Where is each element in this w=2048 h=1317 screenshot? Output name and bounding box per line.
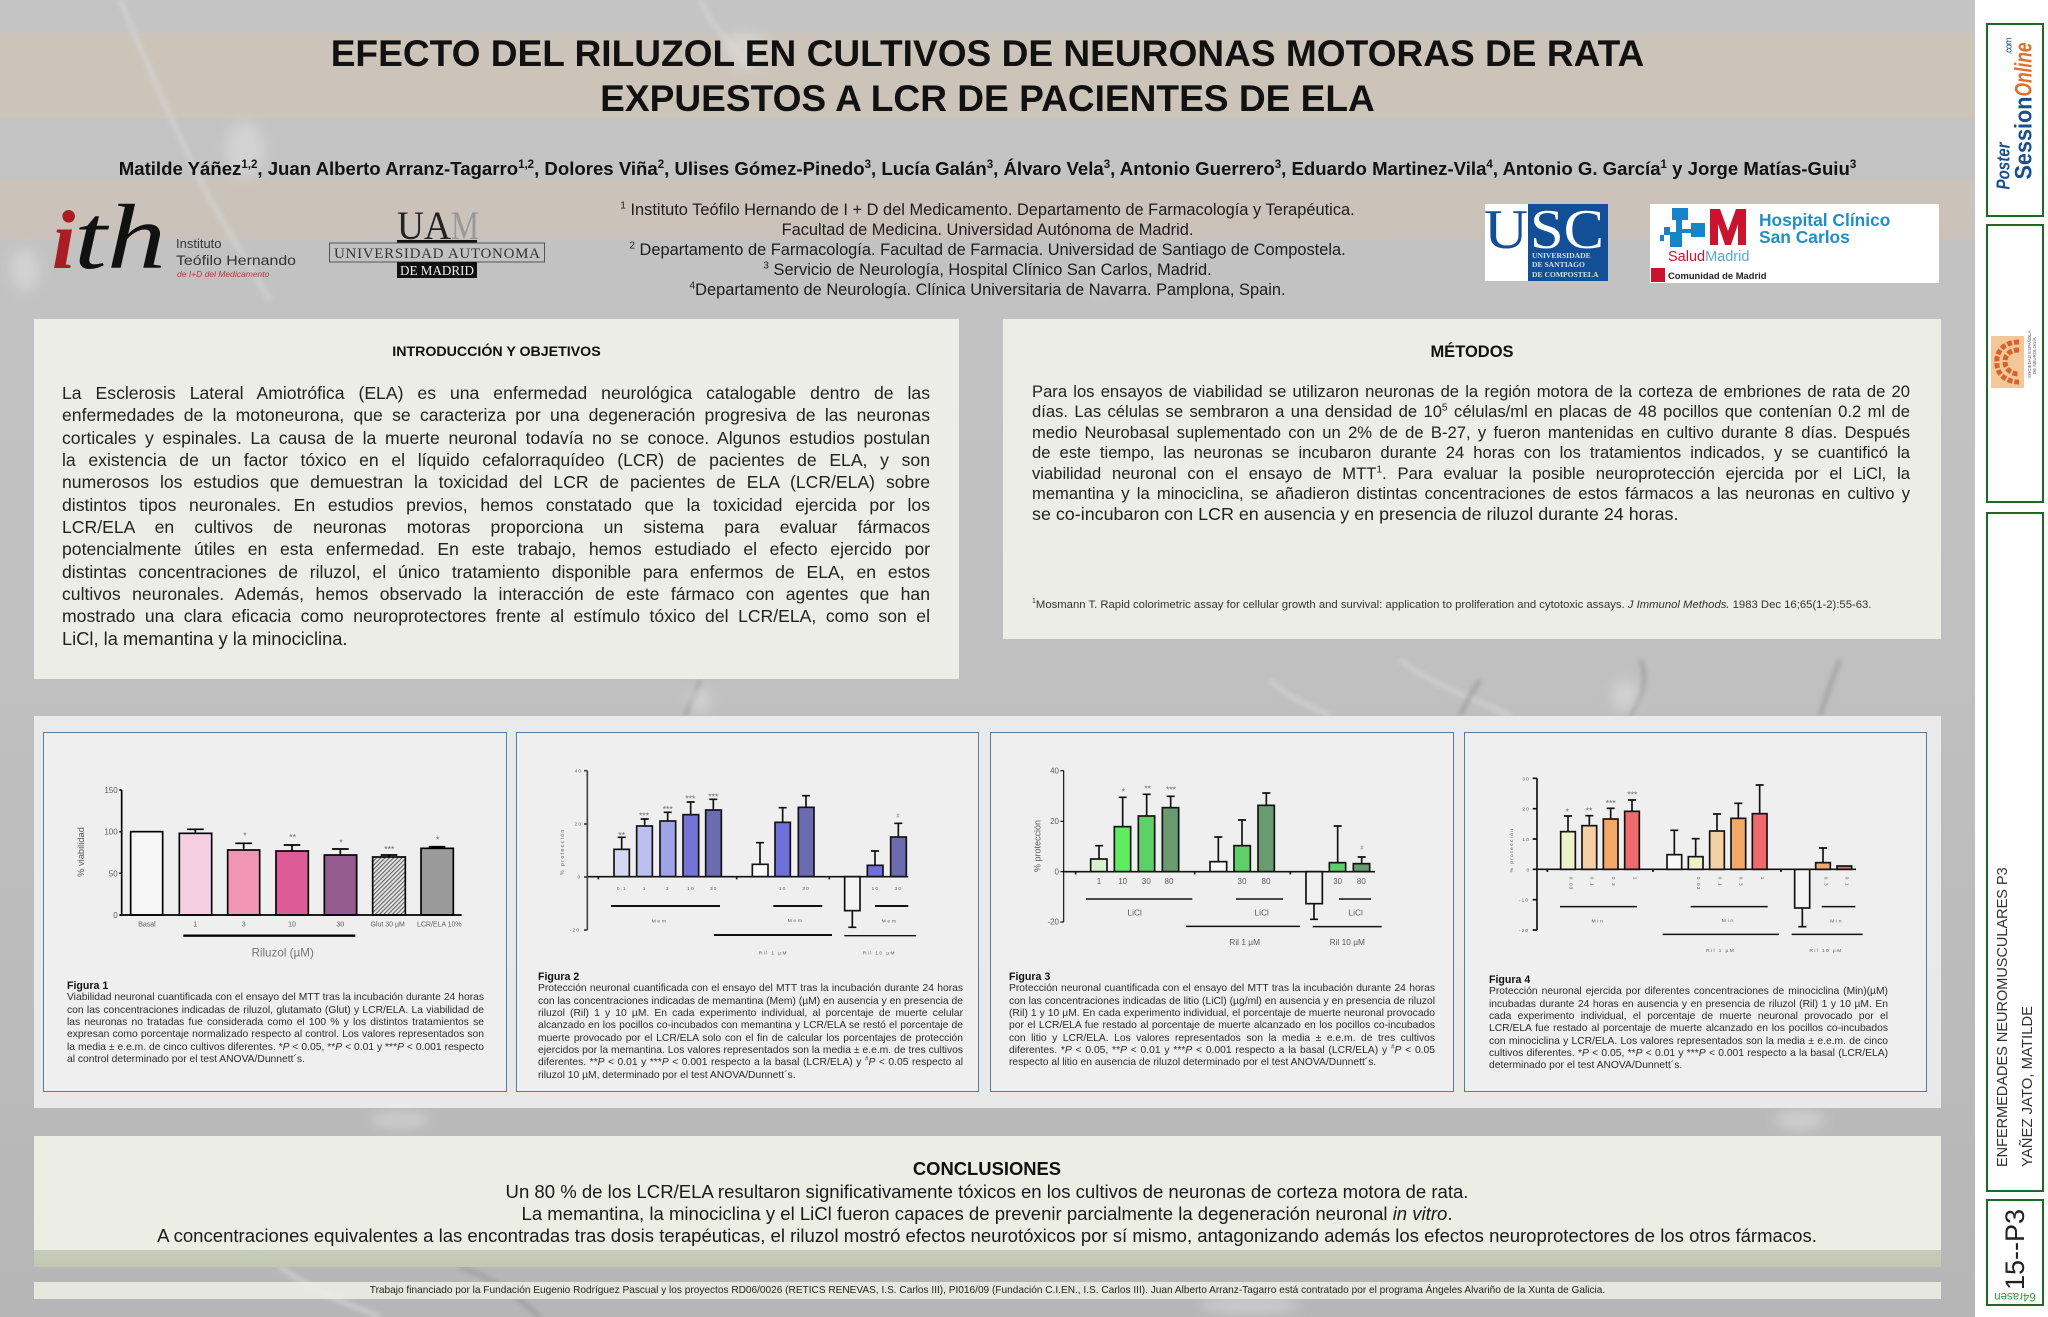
reference: 1Mosmann T. Rapid colorimetric assay for cellular growth and survival: application to proliferation and cytotoxic assays. J Immunol Methods. 1983 Dec 16;65(1-2):55-63. bbox=[1032, 598, 1871, 611]
chart: protección por memantina: 10 bbox=[872, 886, 879, 892]
chart: protección por memantina: *** bbox=[639, 811, 650, 821]
chart: protección por minociclina: Ril 1 µM bbox=[1706, 948, 1735, 954]
text block: métodos: memantina y la minociclina, se añadieron distintas concentraciones de estos fármacos a las neuronas en cultivo y bbox=[1032, 484, 1910, 503]
text block: introducción: distintas concentraciones de riluzol, el único tratamiento disponible para enfermos de ELA, en estos bbox=[62, 562, 930, 582]
caption: figura 3: Figura 3 bbox=[1009, 971, 1050, 983]
caption: figura 4 bbox=[1489, 974, 1888, 1071]
text block: conclusiones: A concentraciones equivalentes a las encontradas tras dosis terapéuticas, el riluzol mostró efectos neurotóxicos por sí mismo, antagonizando además los efectos neuroprotectores de los otros fármacos. bbox=[157, 1225, 1817, 1246]
chart: protección por minociclina: Min bbox=[1591, 919, 1605, 925]
caption: figura 2 bbox=[538, 971, 963, 1081]
sidebar: Sociedad Española de Neurología logo: DE NEUROLOGÍA bbox=[2032, 337, 2037, 374]
chart: protección por litio: Ril 10 µM bbox=[1330, 937, 1365, 947]
logo: Instituto Teófilo Hernando: Instituto bbox=[176, 236, 222, 251]
figure 2 bbox=[516, 732, 979, 1092]
logo: Hospital Clínico San Carlos: Hospital Clínico bbox=[1759, 210, 1890, 230]
chart: protección por litio: LiCl bbox=[1254, 907, 1269, 917]
panel: conclusiones bbox=[34, 1136, 1941, 1267]
caption: figura 3 bbox=[1009, 971, 1435, 1068]
logo: Universidade de Santiago de Compostela: UNIVERSIDADE bbox=[1532, 251, 1591, 260]
chart: protección por memantina: ** bbox=[618, 830, 626, 840]
sidebar: PosterSessionOnline logo: Session bbox=[2010, 96, 2038, 180]
chart: protección por minociclina: 0.3 bbox=[1822, 877, 1828, 887]
text block: métodos: viabilidad neuronal con el ensayo de MTT1. Para evaluar la posible neuroprotección ejercida por el LiCl, la bbox=[1032, 464, 1910, 483]
chart: viabilidad neuronal: 150 bbox=[104, 786, 118, 795]
caption: figura 2: con las concentraciones indicadas de memantina (Mem) (µM) en ausencia y en presencia de bbox=[538, 996, 963, 1007]
text block: métodos: se co-incubaron con LCR en ausencia y en presencia de riluzol durante 24 horas. bbox=[1032, 504, 1678, 524]
sidebar: Sociedad Española de Neurología logo bbox=[1986, 224, 2044, 503]
caption: figura 1 bbox=[67, 980, 484, 1065]
chart: viabilidad neuronal: 30 bbox=[336, 921, 344, 928]
text block: métodos: Para los ensayos de viabilidad se utilizaron neuronas de la región motora de la corteza de embriones de rata de 20 bbox=[1032, 382, 1910, 401]
chart: protección por minociclina: 0.03 bbox=[1567, 877, 1573, 890]
caption: figura 1: Figura 1 bbox=[67, 980, 108, 992]
heading: métodos: MÉTODOS bbox=[1430, 343, 1514, 361]
text block: conclusiones: Un 80 % de los LCR/ELA resultaron significativamente tóxicos en los cultivos de neuronas de corteza motora de rata. bbox=[506, 1181, 1468, 1202]
chart: protección por minociclina: 0.1 bbox=[1844, 877, 1850, 887]
chart: protección por minociclina: Min bbox=[1830, 919, 1843, 925]
chart: viabilidad neuronal: 0 bbox=[113, 911, 118, 920]
logo: Universidad Autónoma de Madrid bbox=[329, 206, 545, 279]
sidebar: session and author bbox=[1986, 512, 2044, 1192]
chart: protección por memantina: *** bbox=[708, 791, 719, 801]
logo: Universidade de Santiago de Compostela: DE SANTIAGO bbox=[1532, 260, 1585, 269]
chart: viabilidad neuronal: *** bbox=[384, 844, 395, 854]
chart: protección por litio: 80 bbox=[1165, 877, 1174, 886]
chart: viabilidad neuronal: * bbox=[436, 835, 440, 845]
text block: conclusiones bbox=[157, 1181, 1817, 1246]
chart: protección por litio: 30 bbox=[1238, 877, 1247, 886]
chart: protección por memantina: *** bbox=[685, 794, 696, 804]
chart: viabilidad neuronal: ** bbox=[289, 832, 297, 842]
caption: figura 3: Protección neuronal cuantificada con el ensayo del MTT tras la incubación durante 24 horas bbox=[1009, 983, 1435, 994]
caption: figura 3: por el LCR/ELA fue restado al porcentaje de muerte alcanzado en los pocillos co-incubados bbox=[1009, 1020, 1435, 1031]
logo: Instituto Teófilo Hernando: Teófilo Hernando bbox=[176, 252, 296, 268]
caption: figura 1: expresan como porcentaje normalizado respecto al control. Los valores representados son bbox=[67, 1029, 484, 1040]
logo: Universidad Autónoma de Madrid: UNIVERSIDAD AUTONOMA bbox=[334, 246, 540, 262]
chart: protección por minociclina: 1 bbox=[1759, 877, 1765, 880]
text block: introducción: la existencia de un factor tóxico en el líquido cefalorraquídeo (LCR) de pacientes de ELA, y son bbox=[62, 450, 930, 470]
text block: introducción: LCR/ELA en cultivos de neuronas motoras proporciona un sistema para evaluar fármacos bbox=[62, 517, 930, 537]
chart: protección por memantina: *** bbox=[663, 804, 673, 814]
chart: viabilidad neuronal: 100 bbox=[104, 828, 118, 837]
chart: viabilidad neuronal bbox=[76, 786, 462, 960]
chart: viabilidad neuronal: % viabilidad bbox=[76, 827, 86, 877]
title bbox=[331, 32, 1644, 119]
chart: protección por memantina: 0 bbox=[577, 875, 581, 881]
chart: protección por minociclina: Ril 10 µM bbox=[1809, 948, 1843, 954]
caption: figura 1: al control determinado por el test ANOVA/Dunnett´s. bbox=[67, 1054, 305, 1065]
logo: Instituto Teófilo Hernando bbox=[52, 200, 296, 285]
sidebar: PosterSessionOnline logo bbox=[1986, 23, 2044, 217]
chart: viabilidad neuronal: 10 bbox=[288, 921, 296, 928]
chart: viabilidad neuronal: * bbox=[339, 837, 343, 847]
caption: figura 2: ejercidos por la memantina. Los valores representados son la media ± e.e.m. de tres cultivos bbox=[538, 1045, 963, 1056]
chart: protección por minociclina: * bbox=[1566, 807, 1570, 817]
chart: viabilidad neuronal: * bbox=[243, 831, 247, 841]
caption: figura 2: diferentes. **P < 0.01 y ***P < 0.001 respecto a la basal (LCR/ELA) y #P < 0.05 respecto al bbox=[538, 1056, 963, 1068]
panel: introducción y objetivos bbox=[34, 319, 959, 679]
chart: protección por minociclina: *** bbox=[1627, 790, 1638, 800]
logo: Universidad Autónoma de Madrid: DE MADRID bbox=[400, 264, 474, 279]
chart: protección por minociclina: % protección bbox=[1509, 828, 1515, 872]
chart: protección por memantina: Mem bbox=[652, 919, 668, 925]
chart: protección por memantina: 30 bbox=[895, 886, 902, 892]
chart: viabilidad neuronal: 1 bbox=[193, 921, 197, 928]
caption: figura 4: con minociclina y LCR/ELA. Los valores representados son la media ± e.e.m. de cinco bbox=[1489, 1036, 1888, 1047]
chart: protección por minociclina: *** bbox=[1606, 798, 1616, 808]
chart: viabilidad neuronal: 3 bbox=[242, 921, 246, 928]
caption: figura 3: (Ril) 1 y 10 µM. En cada experimento individual, el porcentaje de muerte neuronal provocado bbox=[1009, 1008, 1435, 1019]
logo: Hospital Clínico San Carlos bbox=[1650, 204, 1939, 283]
funding acknowledgement bbox=[34, 1282, 1941, 1299]
caption: figura 1: la media ± e.e.m. de cinco cultivos diferentes. *P < 0.05, **P < 0.01 y ***P < 0.001 respecto bbox=[67, 1042, 484, 1053]
text block: métodos: medio Neurobasal suplementado con un 2% de de B-27, y fueron mantenidas en cultivo durante 8 días. Después bbox=[1032, 423, 1910, 442]
chart: protección por litio: LiCl bbox=[1127, 907, 1142, 917]
caption: figura 4: Figura 4 bbox=[1489, 974, 1530, 986]
logo: Hospital Clínico San Carlos: SaludMadrid bbox=[1668, 249, 1749, 265]
caption: figura 4: Protección neuronal ejercida por diferentes concentraciones de minociclina (Min)(µM) bbox=[1489, 986, 1888, 997]
logo: Hospital Clínico San Carlos: San Carlos bbox=[1759, 227, 1850, 247]
affiliations: 2 Departamento de Farmacología. Facultad de Farmacia. Universidad de Santiago de Compostela. bbox=[629, 241, 1346, 259]
chart: protección por litio: -20 bbox=[1047, 918, 1060, 927]
logo: Universidade de Santiago de Compostela bbox=[1485, 204, 1608, 281]
chart: protección por litio: * bbox=[1122, 787, 1126, 797]
caption: figura 3: diferentes. *P < 0.05, **P < 0.01 y ***P < 0.001 respecto a la basal (LCR/ELA) y #P < 0.05 bbox=[1009, 1044, 1435, 1056]
figure 1 bbox=[43, 732, 507, 1092]
chart: protección por litio: 80 bbox=[1357, 877, 1366, 886]
chart: protección por minociclina: 0.3 bbox=[1610, 877, 1616, 887]
heading: conclusiones: CONCLUSIONES bbox=[913, 1158, 1061, 1179]
authors: Matilde Yáñez1,2, Juan Alberto Arranz-Tagarro1,2, Dolores Viña2, Ulises Gómez-Pinedo3, Lucía Galán3, Álvaro Vela3, Antonio Guerrero3, Eduardo Martinez-Vila4, Antonio G. García1 y Jorge Matías-Guiu3 bbox=[119, 158, 1856, 179]
title: EXPUESTOS A LCR DE PACIENTES DE ELA bbox=[600, 77, 1375, 119]
chart: protección por litio: 30 bbox=[1333, 877, 1343, 886]
figure 4 bbox=[1464, 732, 1927, 1092]
chart: viabilidad neuronal: 50 bbox=[109, 869, 118, 878]
caption: figura 3: con litio y LCR/ELA. Los valores representados son la media ± e.e.m. de tres cultivos bbox=[1009, 1033, 1435, 1044]
affiliations: 3 Servicio de Neurología, Hospital Clínico San Carlos, Madrid. bbox=[763, 261, 1212, 279]
chart: protección por litio: 30 bbox=[1142, 877, 1151, 886]
text block: introducción: LiCl, la memantina y la minociclina. bbox=[62, 628, 348, 649]
chart: protección por minociclina: 0 bbox=[1526, 867, 1530, 873]
caption: figura 3: respecto al litio en ausencia de riluzol determinado por el test ANOVA/Dunnett´s. bbox=[1009, 1057, 1376, 1068]
text block: introducción: corticales y espinales. La causa de la muerte neuronal todavía no se conoce. Algunos estudios postulan bbox=[62, 428, 930, 448]
chart: protección por litio: 0 bbox=[1055, 867, 1060, 876]
chart: protección por litio bbox=[1032, 766, 1382, 947]
chart: protección por litio: 80 bbox=[1262, 877, 1271, 886]
brand mark: 64rasen bbox=[1994, 1290, 2036, 1302]
chart: protección por minociclina: 0.03 bbox=[1695, 877, 1701, 890]
chart: protección por litio: % protección bbox=[1032, 820, 1042, 872]
chart: protección por litio: 10 bbox=[1118, 877, 1128, 886]
chart: protección por memantina: Ril 1 µM bbox=[759, 951, 788, 957]
poster number: 15--P3 bbox=[2000, 1209, 2030, 1290]
chart: protección por minociclina: 0.1 bbox=[1589, 877, 1595, 887]
author name: YAÑEZ JATO, MATILDE bbox=[2020, 1006, 2036, 1167]
affiliations: 4Departamento de Neurología. Clínica Universitaria de Navarra. Pamplona, Spain. bbox=[689, 281, 1286, 299]
chart: protección por minociclina: 0.3 bbox=[1738, 877, 1744, 887]
sidebar: Sociedad Española de Neurología logo: SOCIEDAD ESPAÑOLA bbox=[2027, 330, 2032, 378]
sidebar: PosterSessionOnline logo: Poster bbox=[1994, 142, 2014, 190]
caption: figura 2: Figura 2 bbox=[538, 971, 579, 983]
chart: viabilidad neuronal: LCR/ELA 10% bbox=[417, 921, 462, 928]
title: EFECTO DEL RILUZOL EN CULTIVOS DE NEURONAS MOTORAS DE RATA bbox=[331, 32, 1644, 74]
caption: figura 4: cada experimento individual, el porcentaje de muerte neuronal provocado por el bbox=[1489, 1011, 1888, 1022]
chart: protección por minociclina: ** bbox=[1586, 806, 1593, 816]
text block: métodos bbox=[1032, 382, 1910, 524]
chart: protección por minociclina bbox=[1509, 776, 1863, 954]
caption: figura 2: riluzol (Ril) 1 y 10 µM. En cada experimento individual, al porcentaje de muerte celular bbox=[538, 1008, 963, 1019]
chart: viabilidad neuronal: Glut 30 µM bbox=[371, 921, 405, 928]
caption: figura 2: riluzol 10 µM, determinado por el test ANOVA/Dunnett´s. bbox=[538, 1070, 796, 1081]
chart: protección por minociclina: -20 bbox=[1519, 928, 1529, 934]
chart: protección por minociclina: 1 bbox=[1631, 877, 1637, 880]
caption: figura 2: Protección neuronal cuantificada con el ensayo del MTT tras la incubación durante 24 horas bbox=[538, 983, 963, 994]
logo: Universidade de Santiago de Compostela: DE COMPOSTELA bbox=[1532, 270, 1599, 279]
chart: protección por minociclina: 10 bbox=[1522, 837, 1530, 843]
text block: métodos: días. Las células se sembraron a una densidad de 105 células/ml en placas de 48 pocillos que contenían 0.2 ml de bbox=[1032, 402, 1910, 421]
chart: protección por litio: 40 bbox=[1050, 766, 1060, 775]
text block: métodos: de este tiempo, las neuronas se incubaron durante 24 horas con los tratamientos indicados, y se cuantificó la bbox=[1032, 443, 1910, 462]
chart: protección por litio: Ril 1 µM bbox=[1229, 937, 1260, 947]
text block: introducción: La Esclerosis Lateral Amiotrófica (ELA) es una enfermedad neurológica catalogable dentro de las bbox=[62, 383, 930, 403]
chart: protección por litio: LiCl bbox=[1348, 907, 1363, 917]
affiliations: 1 Instituto Teófilo Hernando de I + D del Medicamento. Departamento de Farmacología y Terapéutica. bbox=[620, 201, 1355, 219]
caption: figura 1: con las concentraciones indicadas de riluzol, glutamato (Glut) y LCR/ELA. La viabilidad de bbox=[67, 1005, 484, 1016]
text block: introducción: enfermedades de la motoneurona, que se caracteriza por una degeneración progresiva de las neuronas bbox=[62, 405, 930, 425]
caption: figura 1: las neuronas no tratadas fue considerada como el 100 % y los distintos tratamientos se bbox=[67, 1017, 484, 1028]
caption: figura 4: cultivos diferentes. *P < 0.05, **P < 0.01 y ***P < 0.001 respecto a la basal (LCR/ELA) bbox=[1489, 1048, 1888, 1059]
chart: protección por memantina: 3 bbox=[666, 886, 670, 892]
text block: introducción: cultivos neuronales. Además, hemos observado la interacción de este fármaco con agentes que han bbox=[62, 584, 930, 604]
chart: protección por memantina: % protección bbox=[560, 828, 566, 875]
chart: protección por memantina: Ril 10 µM bbox=[863, 950, 896, 956]
sidebar: poster code bbox=[1986, 1199, 2044, 1306]
heading: introducción: INTRODUCCIÓN Y OBJETIVOS bbox=[392, 344, 601, 360]
chart: protección por litio: ** bbox=[1144, 783, 1152, 793]
chart: protección por litio: 20 bbox=[1050, 817, 1060, 826]
text block: introducción bbox=[62, 383, 930, 649]
affiliations: Facultad de Medicina. Universidad Autónoma de Madrid. bbox=[782, 221, 1193, 239]
caption: figura 1: Viabilidad neuronal cuantificada con el ensayo del MTT tras la incubación durante 24 horas bbox=[67, 992, 484, 1003]
caption: figura 3: con las concentraciones indicadas de litio (LiCl) (µg/ml) en ausencia y en presencia de riluzol bbox=[1009, 996, 1435, 1007]
text block: introducción: numerosos los estudios que demuestran la toxicidad del LCR de pacientes de ELA (LCR/ELA) sobre bbox=[62, 472, 930, 492]
affiliations bbox=[620, 201, 1355, 299]
chart: protección por memantina: 30 bbox=[802, 886, 810, 892]
text block: introducción: mostrado una clara eficacia como neuroprotectores frente al estímulo tóxico del LCR/ELA, como son el bbox=[62, 606, 930, 626]
chart: protección por minociclina: 30 bbox=[1522, 776, 1530, 782]
chart: viabilidad neuronal: Riluzol (µM) bbox=[251, 947, 314, 960]
chart: protección por memantina: Mem bbox=[788, 918, 804, 924]
chart: protección por minociclina: -10 bbox=[1519, 898, 1529, 904]
chart: protección por memantina: # bbox=[897, 813, 900, 819]
figure 3 bbox=[990, 732, 1454, 1092]
chart: protección por minociclina: 0.1 bbox=[1716, 877, 1722, 887]
chart: protección por minociclina: 20 bbox=[1522, 807, 1530, 813]
panel: figures bbox=[34, 716, 1941, 1108]
caption: figura 4: determinado por el test ANOVA/Dunnett´s. bbox=[1489, 1060, 1682, 1071]
logo: Instituto Teófilo Hernando: de I+D del Medicamento bbox=[177, 269, 270, 279]
text block: introducción: potencialmente útiles en esta enfermedad. En este trabajo, hemos estudiado el efecto ejercido por bbox=[62, 539, 930, 559]
panel: métodos bbox=[1003, 319, 1941, 639]
chart: protección por memantina bbox=[560, 768, 916, 957]
chart: protección por litio: # bbox=[1360, 845, 1364, 851]
chart: protección por memantina: 0.1 bbox=[617, 886, 627, 892]
chart: protección por memantina: 40 bbox=[575, 768, 582, 774]
logo: Hospital Clínico San Carlos: Comunidad de Madrid bbox=[1668, 270, 1767, 281]
caption: figura 2: alcanzado en los pocillos co-incubados con memantina y LCR/ELA se restó el porcentaje de bbox=[538, 1020, 963, 1031]
chart: viabilidad neuronal: Basal bbox=[138, 921, 156, 928]
chart: protección por memantina: Mem bbox=[882, 919, 898, 925]
session name: ENFERMEDADES NEUROMUSCULARES P3 bbox=[1995, 867, 2011, 1167]
chart: protección por memantina: -20 bbox=[570, 928, 580, 934]
text block: introducción: distintos tipos neuronales. En estudios previos, hemos constatado que la toxicidad ejercida por los bbox=[62, 495, 930, 515]
chart: protección por memantina: 10 bbox=[687, 886, 695, 892]
sidebar: PosterSessionOnline logo: .com bbox=[2004, 38, 2014, 54]
caption: figura 2: muerte provocado por el LCR/ELA solo con el fin de calcular los porcentajes de protección bbox=[538, 1033, 963, 1044]
chart: protección por memantina: 20 bbox=[575, 822, 582, 828]
chart: protección por litio: 1 bbox=[1097, 877, 1102, 886]
chart: protección por memantina: 1 bbox=[643, 886, 647, 892]
text block: conclusiones: La memantina, la minociclina y el LiCl fueron capaces de prevenir parcialmente la degeneración neuronal in vitro. bbox=[522, 1203, 1452, 1224]
caption: figura 4: incubadas durante 24 horas en ausencia y en presencia de riluzol (Ril) 1 y 10 µM. En bbox=[1489, 999, 1888, 1010]
chart: protección por minociclina: Min bbox=[1722, 918, 1735, 924]
chart: protección por memantina: 10 bbox=[779, 886, 786, 892]
chart: protección por litio: *** bbox=[1166, 785, 1177, 795]
caption: figura 4: LCR/ELA fue restado al porcentaje de muerte alcanzado en los pocillos co-incubados bbox=[1489, 1023, 1888, 1034]
chart: protección por memantina: 30 bbox=[710, 886, 717, 892]
funding acknowledgement: Trabajo financiado por la Fundación Eugenio Rodríguez Pascual y los proyectos RD06/0026 (RETICS RENEVAS, I.S. Carlos III), PI016/09 (Fundación C.I.EN., I.S. Carlos III). Juan Alberto Arranz-Tagarro está contratado por el programa Ángeles Alvariño de la Xunta de Galicia. bbox=[370, 1285, 1605, 1296]
